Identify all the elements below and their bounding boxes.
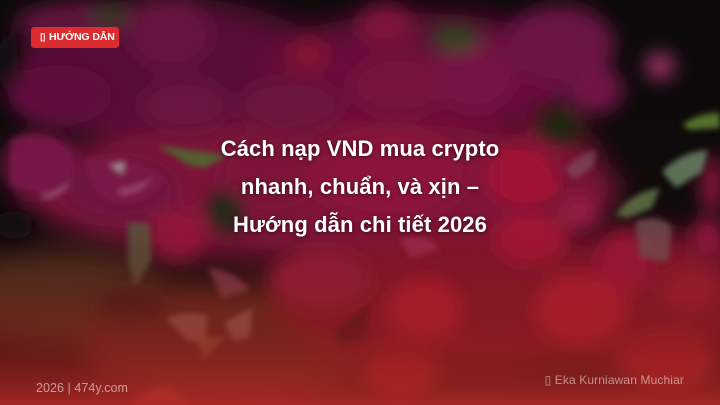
badge: guide category <box>31 27 119 48</box>
title <box>219 136 501 240</box>
badge: guide category: ▯ <box>40 32 46 43</box>
title: Hướng dẫn chi tiết 2026 <box>233 212 487 237</box>
badge: guide category: HƯỚNG DẪN <box>49 31 115 43</box>
footer: author credit: ▯ Eka Kurniawan Muchiar <box>545 373 684 387</box>
title: nhanh, chuẩn, và xịn – <box>241 174 479 199</box>
title: Cách nạp VND mua crypto <box>221 136 499 161</box>
footer: year and site: 2026 | 474y.com <box>36 381 128 395</box>
